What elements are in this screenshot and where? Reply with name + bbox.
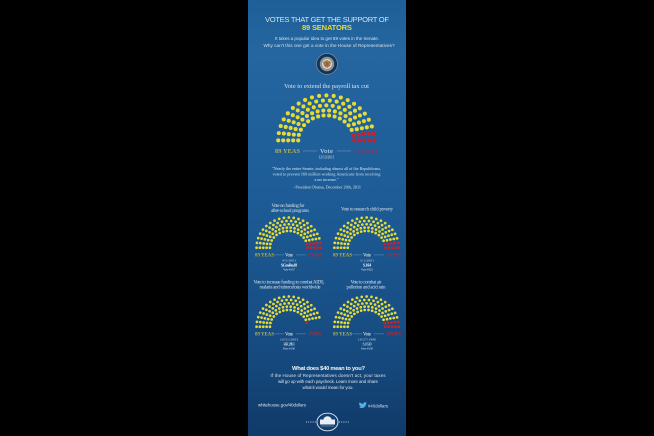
heading: after-school programs xyxy=(271,209,309,214)
intro text: It takes a popular idea to get 89 votes in the Senate. xyxy=(275,36,379,41)
tally xyxy=(255,332,321,350)
chart xyxy=(334,218,399,248)
tally: 6 NAYS xyxy=(308,254,322,258)
chart xyxy=(257,297,319,327)
chart: main senate hemicycle xyxy=(278,95,374,140)
panel: after-school programs vote xyxy=(255,204,322,272)
vote tally: main: 10 NAYS xyxy=(354,148,379,155)
heading: what does $40 mean: What does $40 mean to you? xyxy=(292,366,365,372)
tally: 89 YEAS xyxy=(333,254,352,258)
icon: white house seal xyxy=(306,413,350,431)
quote: - President Obama, December 20th, 2011 xyxy=(293,184,361,190)
heading xyxy=(346,280,386,290)
tally: 10/27/1990 xyxy=(358,338,376,342)
tally: Vote #137 xyxy=(283,268,295,272)
tally: Pass #130 xyxy=(283,346,295,350)
heading: pollution and acid rain xyxy=(346,286,386,290)
tally: Vote xyxy=(363,254,371,258)
chart xyxy=(257,218,321,248)
tally: H.R. 2863 xyxy=(284,342,295,346)
quote: "Nearly the entire Senate, including almost all of the Republicans, xyxy=(272,166,381,172)
panel: AIDS funding vote xyxy=(254,280,324,350)
call to action text: will go up with each paycheck. Learn more and share xyxy=(278,379,378,384)
tally: Vote xyxy=(285,332,293,338)
quote: a tax increase." xyxy=(314,177,339,182)
tally: Pass #130 xyxy=(361,346,373,350)
tally: 10/31/2003 xyxy=(280,338,298,342)
intro text: Why can't this one get a vote in the House of Representatives? xyxy=(264,43,395,48)
call to action text xyxy=(270,373,386,390)
tally: 5 NAYS xyxy=(386,254,401,258)
vote tally: main: 89 YEAS xyxy=(275,148,301,155)
title: VOTES THAT GET THE SUPPORT OF xyxy=(265,15,389,24)
hashtag: #40dollars xyxy=(368,404,388,408)
tally xyxy=(255,254,322,272)
tally xyxy=(333,254,401,272)
tally: 4/5/2001 xyxy=(282,258,296,262)
heading: Vote on funding for xyxy=(272,204,305,209)
tally: Vote xyxy=(285,254,293,258)
chart xyxy=(334,297,399,327)
tally: Vote xyxy=(363,332,371,338)
icon: house seal xyxy=(316,54,338,74)
tally: 89 YEAS xyxy=(333,332,352,338)
tally: 3/1/2001 xyxy=(360,258,374,262)
background panel xyxy=(248,0,406,436)
panel: child poverty vote xyxy=(333,208,401,272)
panel: air pollution vote xyxy=(333,280,401,350)
title xyxy=(265,15,389,32)
tally: 1 NAYS xyxy=(308,332,321,338)
icon: twitter bird xyxy=(359,402,367,408)
tally: Vote #322 xyxy=(361,268,373,272)
tally xyxy=(333,332,401,350)
intro text xyxy=(264,36,395,48)
vote tally: main: 12/13/2011 xyxy=(318,156,335,160)
link: whitehouse.gov/40dollars: whitehouse.gov/40dollars xyxy=(258,402,307,408)
heading: payroll tax cut vote: Vote to extend the payroll tax cut xyxy=(284,83,369,90)
tally: S.164 xyxy=(363,264,371,268)
heading: malaria and tuberculosis worldwide xyxy=(260,286,320,290)
heading: Vote to research child poverty xyxy=(341,208,394,212)
tally: S.1630 xyxy=(362,342,372,346)
call to action text: what it would mean for you. xyxy=(302,385,354,390)
heading: Vote to combat air xyxy=(350,280,382,286)
call to action text: If the House of Representatives doesn't act, your taxes xyxy=(270,373,386,378)
tally: S.Con.Res.18 xyxy=(281,264,297,268)
vote tally: main: Vote xyxy=(320,148,333,155)
heading xyxy=(271,204,309,214)
tally: 89 YEAS xyxy=(255,254,274,258)
vote tally: main xyxy=(275,148,379,160)
title: 89 SENATORS xyxy=(302,23,352,32)
heading: Vote to increase funding to combat AIDS, xyxy=(254,280,324,286)
quote: voted to prevent 160 million working Americans from receiving xyxy=(272,172,381,176)
tally: 11 NAYS xyxy=(386,332,401,338)
quote xyxy=(272,166,381,190)
tally: 89 YEAS xyxy=(255,332,274,338)
heading xyxy=(254,280,324,290)
